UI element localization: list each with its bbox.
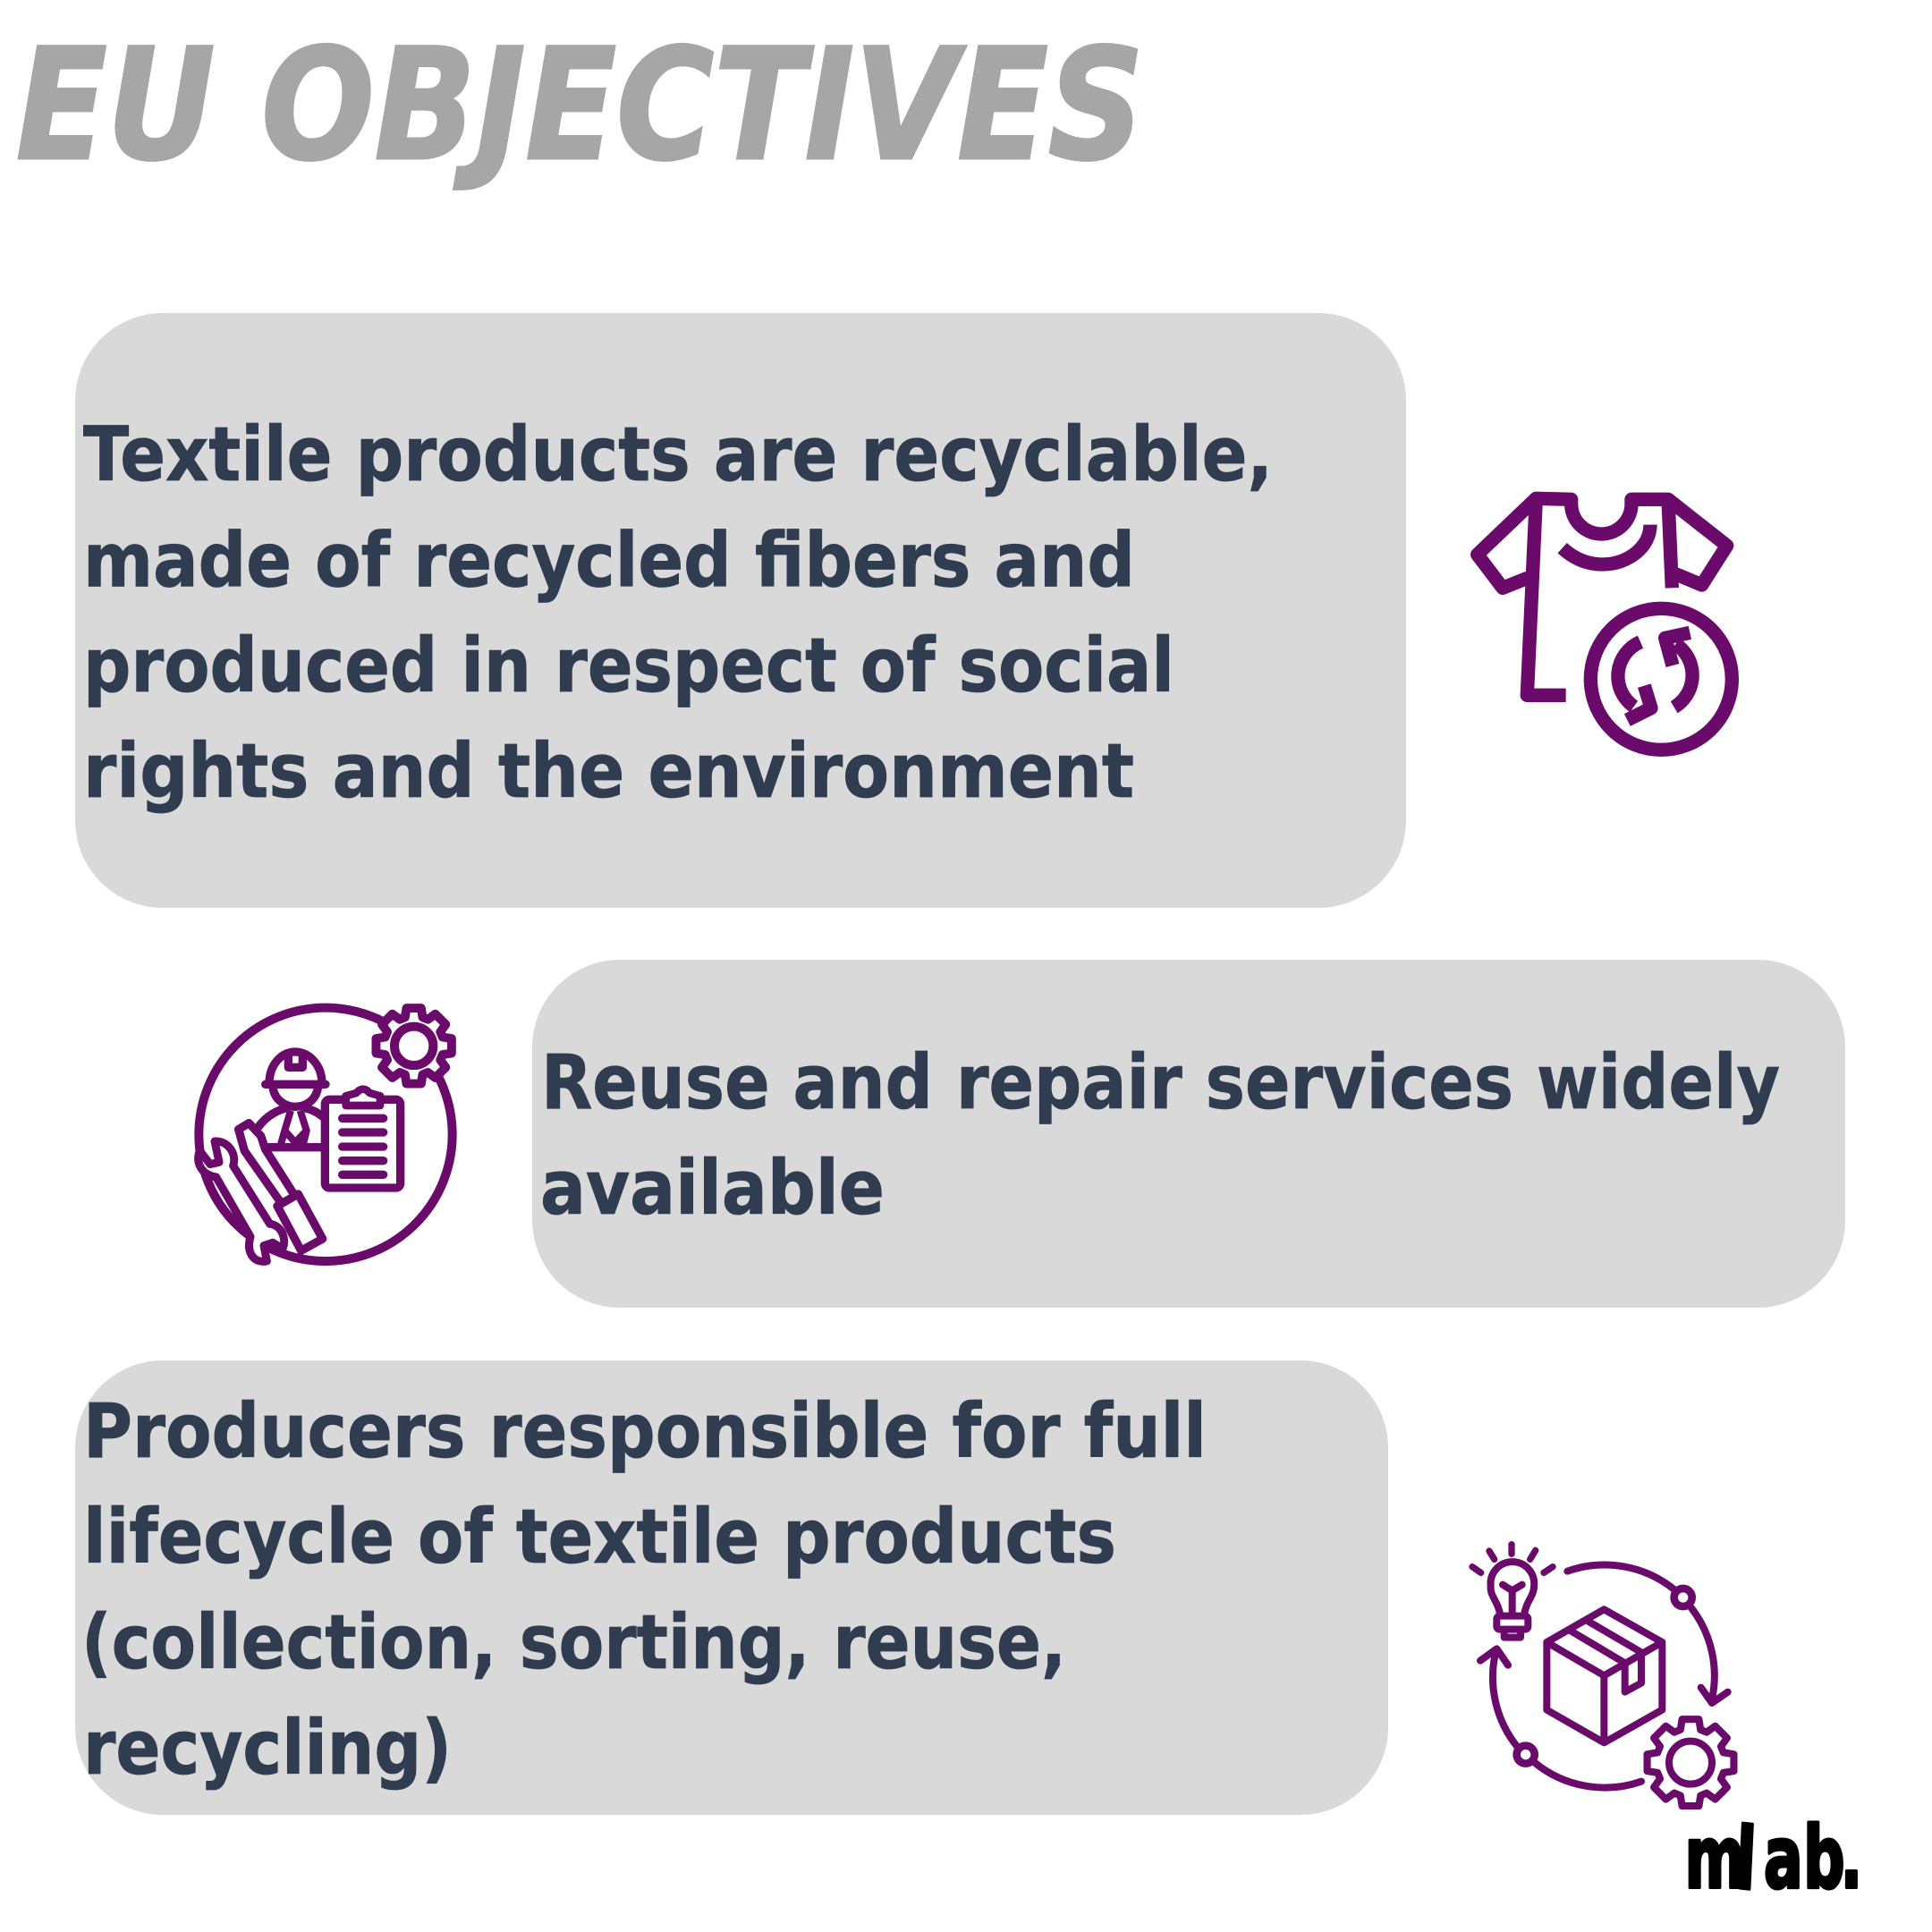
text block: Producers responsible for full xyxy=(83,1387,1207,1475)
text block: produced in respect of social xyxy=(83,622,1174,709)
panel background xyxy=(532,960,1845,1308)
text block xyxy=(81,1387,1207,1792)
logo: mlab: mlab. xyxy=(1685,1809,1862,1911)
text block: (collection, sorting, reuse, xyxy=(81,1598,1066,1686)
text block: Reuse and repair services widely xyxy=(541,1038,1780,1126)
text block: available xyxy=(540,1144,885,1232)
panel background xyxy=(75,313,1406,908)
text block: Textile products are recyclable, xyxy=(83,411,1273,498)
icon: product lifecycle loop xyxy=(1472,1545,1733,1806)
text block: lifecycle of textile products xyxy=(83,1493,1116,1580)
text block xyxy=(540,1038,1780,1232)
panel: reuse and repair services xyxy=(532,960,1845,1308)
icon: repair worker with tools xyxy=(199,1008,453,1261)
text block: recycling) xyxy=(83,1704,452,1792)
text block: rights and the environment xyxy=(83,727,1134,815)
panel: recyclable textile products xyxy=(75,313,1406,908)
text block xyxy=(83,411,1273,815)
panel: producer responsibility xyxy=(75,1360,1388,1815)
panel background xyxy=(75,1360,1388,1815)
text block: made of recycled fibers and xyxy=(83,517,1135,605)
title: EU OBJECTIVES xyxy=(16,15,1144,195)
icon: t-shirt with recycling arrows xyxy=(1478,498,1732,750)
